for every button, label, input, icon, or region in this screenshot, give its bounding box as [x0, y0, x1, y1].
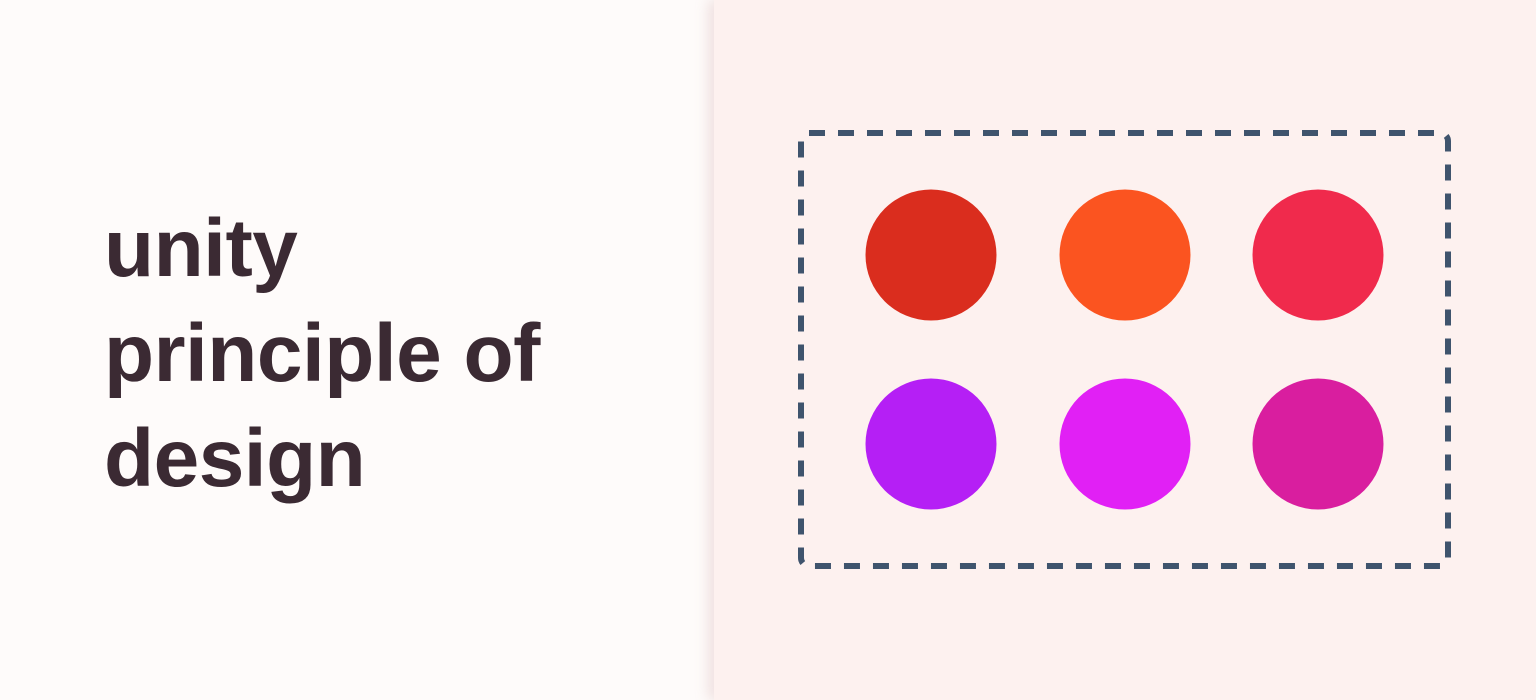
title: unity	[104, 203, 297, 294]
dashed frame	[801, 133, 1448, 566]
title: design	[104, 413, 365, 504]
circles	[866, 190, 1384, 510]
title: principle of	[104, 308, 540, 399]
title	[104, 203, 541, 504]
illustration: dashed group of circles	[798, 130, 1451, 569]
panel: left	[0, 0, 714, 700]
panel: right	[714, 0, 1536, 700]
